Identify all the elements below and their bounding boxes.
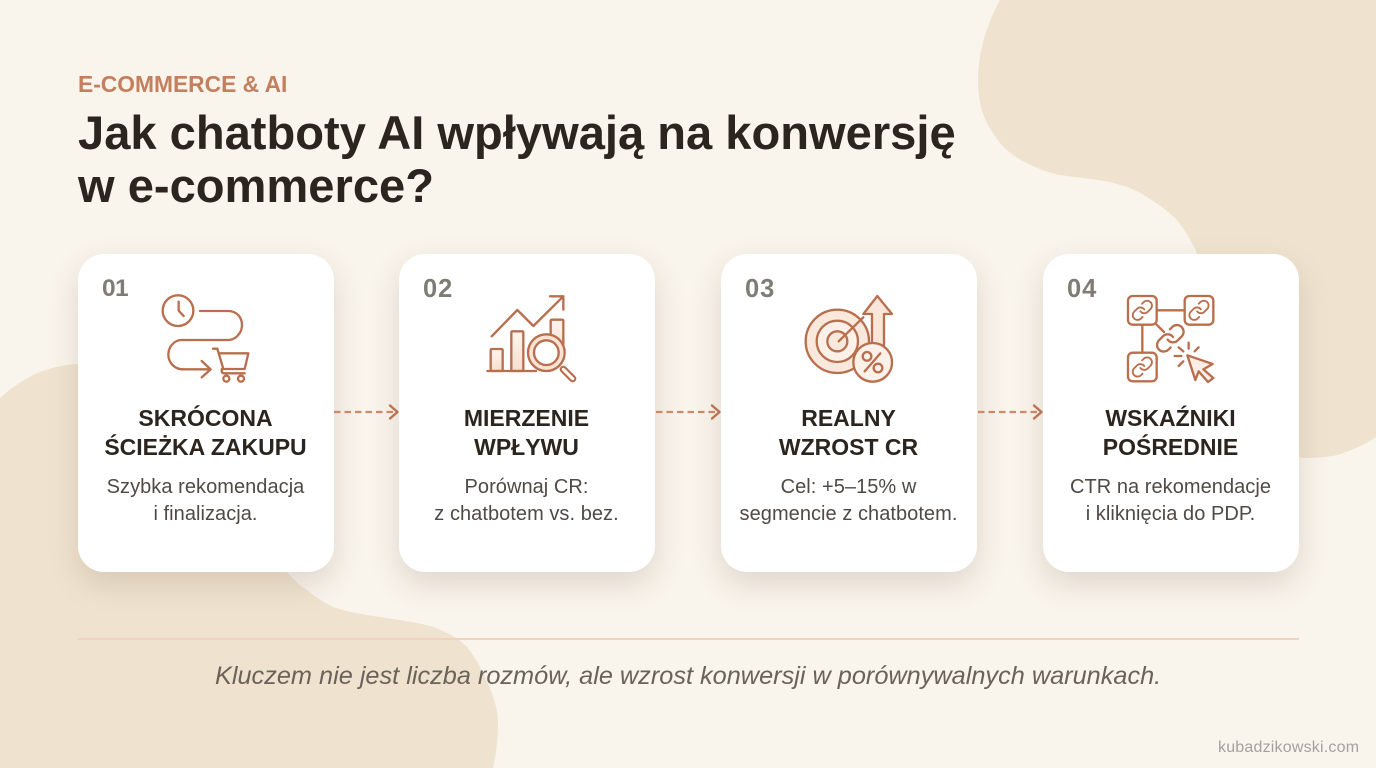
description: i kliknięcia do PDP.: [1086, 503, 1255, 525]
heading: [464, 405, 589, 460]
heading: [104, 405, 307, 460]
arrow 3 to 4: [978, 404, 1043, 420]
heading: WPŁYWU: [474, 434, 579, 460]
blob: bottom left: [0, 364, 498, 768]
card 04: [1043, 254, 1299, 572]
description: Cel: +5–15% w: [781, 476, 916, 498]
number 03: 03: [745, 274, 775, 302]
heading: ŚCIEŻKA ZAKUPU: [104, 434, 307, 460]
arrow 1 to 2: [334, 404, 399, 420]
eyebrow label: E-COMMERCE & AI: [78, 71, 287, 97]
title: [78, 106, 956, 212]
description: [740, 476, 957, 525]
heading: MIERZENIE: [464, 405, 589, 431]
description: Porównaj CR:: [464, 476, 588, 498]
title: Jak chatboty AI wpływają na konwersję: [78, 106, 956, 158]
icon: target with arrow and percent: [804, 294, 894, 383]
arrow 2 to 3: [656, 404, 721, 420]
number 04: 04: [1067, 274, 1097, 302]
blob: top right: [978, 0, 1376, 458]
number 01: 01: [102, 274, 128, 302]
watermark: kubadzikowski.com: [1218, 739, 1359, 756]
description: Szybka rekomendacja: [107, 476, 304, 498]
card 03: [721, 254, 977, 572]
heading: [778, 405, 918, 460]
footer divider: [78, 638, 1299, 640]
icon: clock path to cart: [162, 294, 250, 383]
heading: POŚREDNIE: [1103, 434, 1238, 460]
description: z chatbotem vs. bez.: [434, 503, 619, 525]
description: CTR na rekomendacje: [1070, 476, 1271, 498]
description: i finalizacja.: [153, 503, 258, 525]
card 02: [399, 254, 655, 572]
description: [107, 476, 304, 525]
description: [434, 476, 619, 525]
icon: linked nodes and cursor: [1126, 294, 1214, 384]
description: [1070, 476, 1271, 525]
heading: SKRÓCONA: [138, 405, 273, 431]
card 01: [78, 254, 334, 572]
description: segmencie z chatbotem.: [740, 503, 957, 525]
heading: WZROST CR: [779, 434, 918, 460]
heading: [1103, 405, 1238, 460]
key takeaway: Kluczem nie jest liczba rozmów, ale wzrost konwersji w porównywalnych warunkach.: [215, 662, 1161, 690]
heading: REALNY: [801, 405, 896, 431]
title: w e-commerce?: [78, 158, 434, 212]
number 02: 02: [423, 274, 453, 302]
heading: WSKAŹNIKI: [1105, 405, 1236, 431]
icon: bar chart with magnifier: [486, 295, 576, 382]
